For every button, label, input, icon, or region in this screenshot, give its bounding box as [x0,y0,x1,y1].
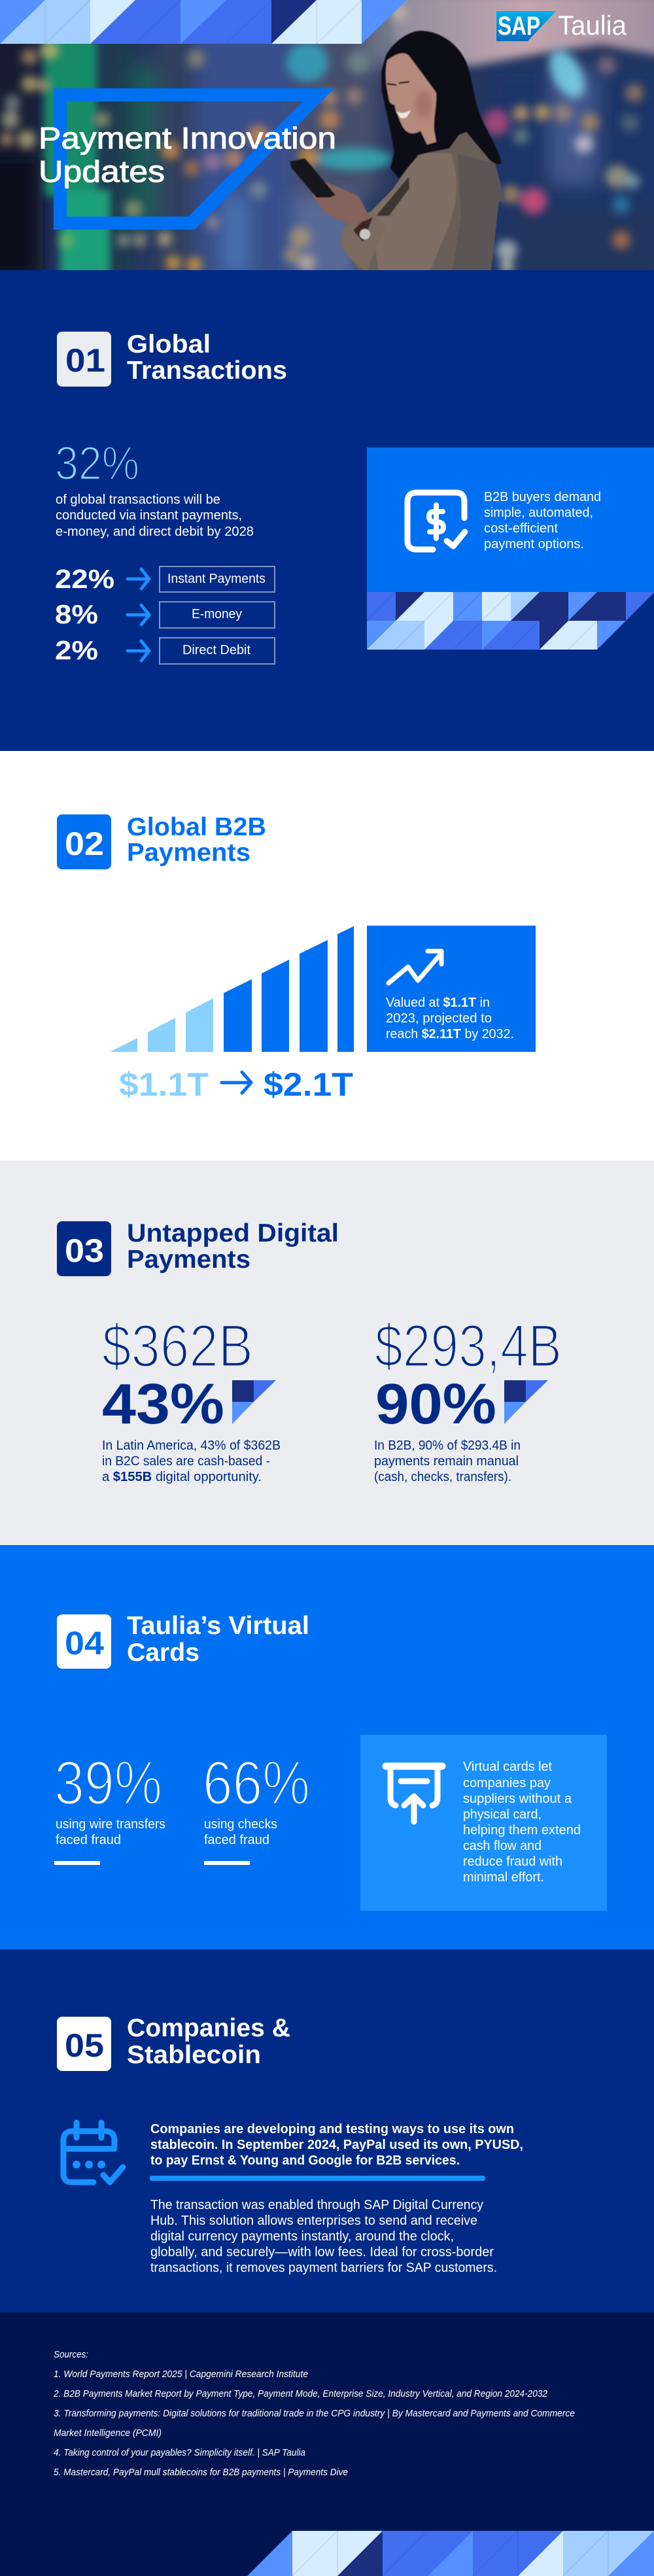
SAP Taulia logo: SAP [498,12,540,41]
stat column: Latin America: in B2C sales are cash-based - [102,1454,270,1469]
callout panel: virtual cards: minimal effort. [463,1870,544,1885]
growth figures: $2.1T [264,1066,353,1103]
stat column: B2B [374,1313,562,1484]
section 03 heading [127,1219,339,1274]
section 04 badge: 04 [65,1625,104,1662]
section 03 badge [57,1221,111,1276]
stat: checks fraud: 66% [203,1749,310,1818]
section 01 heading [127,330,287,385]
icon: calendar with check [63,2123,123,2182]
icon: rising trend arrow [388,951,441,983]
breakdown row: e-money: 8% [55,599,98,629]
stat column: Latin America: a $155B digital opportunity. [102,1470,262,1484]
section 05 heading: Stablecoin [127,2041,261,2069]
callout panel: market value [367,926,536,1052]
growth figures [119,1066,353,1103]
stablecoin lead text: stablecoin. In September 2024, PayPal used its own, PYUSD, [150,2138,523,2152]
stat description: e-money, and direct debit by 2028 [56,525,254,539]
stablecoin body text: The transaction was enabled through SAP Digital Currency [150,2198,483,2212]
breakdown row: e-money [55,599,275,629]
callout panel: market value: 2023, projected to [386,1011,492,1026]
section 01 badge [57,332,111,387]
section 02 background [0,751,654,1160]
bokeh lights [0,5,644,273]
section 04 heading [127,1612,309,1667]
section 04 heading: Taulia’s Virtual [127,1612,309,1640]
sources list [53,2349,575,2478]
section 02 badge: 02 [65,826,104,862]
stablecoin body text: globally, and securely—with low fees. Ideal for cross-border [150,2245,494,2259]
callout geometric pattern [367,592,654,650]
section 03 badge: 03 [65,1232,104,1269]
stat description: of global transactions will be [56,493,220,507]
top geometric pattern banner [0,0,407,44]
stat column: Latin America [102,1313,281,1484]
sources list: 3. Transforming payments: Digital solutions for traditional trade in the CPG industry | By Mastercard and Payments and Commerce [54,2408,575,2419]
section 04 heading: Cards [127,1639,199,1667]
bar chart: rising market value [110,926,354,1052]
stat column: B2B: $293,4B [375,1313,562,1380]
hero title frame [54,88,334,230]
breakdown row: direct debit: Direct Debit [182,643,250,657]
stat: checks fraud: faced fraud [204,1833,269,1847]
breakdown row: direct debit [55,635,275,665]
section 05 badge [57,2017,111,2071]
icon: dollar document with check [407,493,465,549]
hero photo: woman with phone against night city [0,0,654,288]
stablecoin body text [150,2198,497,2275]
footer geometric pattern [247,2531,654,2576]
callout panel: B2B buyers: payment options. [484,537,584,551]
section 05 background [0,1949,654,2312]
stat: wire transfers fraud: faced fraud [56,1833,121,1847]
section 03 heading: Payments [127,1245,250,1274]
stat column: Latin America: $362B [102,1313,253,1380]
section 02 heading: Global B2B [127,813,266,841]
callout panel: virtual cards: reduce fraud with [463,1854,562,1869]
section 02 heading [127,813,266,867]
stat description [56,493,254,539]
icon: card with upload arrow [386,1766,442,1822]
stat: wire transfers fraud: 39% [54,1749,162,1818]
breakdown row: instant payments [55,564,275,594]
section 03 background [0,1160,654,1545]
callout panel: B2B buyers [367,447,654,592]
stablecoin lead text: to pay Ernst & Young and Google for B2B services. [150,2153,460,2168]
section 05 heading: Companies & [127,2014,290,2042]
callout panel: virtual cards: helping them extend [463,1823,581,1837]
sources list: 1. World Payments Report 2025 | Capgemini Research Institute [54,2369,308,2380]
sources list: Market Intelligence (PCMI) [54,2428,162,2439]
section 05 badge: 05 [65,2027,104,2064]
stat column: B2B: 90% [375,1372,496,1436]
stat: wire transfers fraud: using wire transfers [56,1817,165,1832]
callout panel: market value: Valued at $1.1T in [386,996,490,1010]
section 01 background [0,270,654,751]
breakdown row: direct debit: 2% [55,635,98,665]
sources list: 5. Mastercard, PayPal mull stablecoins for B2B payments | Payments Dive [54,2467,348,2478]
callout panel: B2B buyers: simple, automated, [484,506,593,520]
sources list: 4. Taking control of your payables? Simplicity itself. | SAP Taulia [54,2447,305,2458]
hero title: Payment Innovation [39,121,336,155]
callout panel: virtual cards: Virtual cards let [463,1760,552,1774]
SAP Taulia logo: Taulia [558,10,627,41]
callout panel: B2B buyers: cost-efficient [484,521,558,536]
stablecoin body text: transactions, it removes payment barriers for SAP customers. [150,2261,497,2275]
stablecoin body text: digital currency payments instantly, around the clock, [150,2229,454,2244]
stat column: B2B: (cash, checks, transfers). [374,1470,511,1484]
hero title: Updates [39,154,165,188]
section 02 badge [57,814,111,869]
stablecoin lead text: Companies are developing and testing ways to use its own [150,2122,514,2136]
stat column: B2B: payments remain manual [374,1454,519,1469]
stat: wire transfers fraud [54,1749,165,1865]
stat column: Latin America: In Latin America, 43% of $362B [102,1438,281,1453]
32 percent stat: 32% [55,438,139,490]
section 05 heading [127,2014,290,2069]
callout panel: virtual cards: suppliers without a [463,1792,572,1806]
callout panel: virtual cards: physical card, [463,1807,542,1822]
section 04 background [0,1545,654,1949]
sources list: Sources: [54,2349,88,2360]
stat description: conducted via instant payments, [56,508,242,523]
section 04 badge [57,1614,111,1669]
growth figures: $1.1T [119,1066,209,1103]
section 01 heading: Global [127,330,211,358]
stat column: B2B: In B2B, 90% of $293.4B in [374,1438,521,1453]
icon: triangle mark [504,1380,548,1424]
callout panel: B2B buyers: B2B buyers demand [484,490,601,504]
callout panel: market value: reach $2.11T by 2032. [386,1027,514,1041]
stat: checks fraud [203,1749,310,1865]
section 02 heading: Payments [127,839,250,867]
arrow: growth [222,1072,251,1093]
hero title [39,121,336,188]
stablecoin body text: Hub. This solution allows enterprises to send and receive [150,2214,477,2228]
breakdown row: instant payments: Instant Payments [167,572,266,586]
breakdown row: e-money: E-money [192,607,242,621]
callout panel: virtual cards: companies pay [463,1776,551,1790]
callout panel: virtual cards: cash flow and [463,1839,542,1853]
stat column: Latin America: 43% [102,1372,224,1436]
woman figure [290,31,506,275]
sources list: 2. B2B Payments Market Report by Payment Type, Payment Mode, Enterprise Size, Industry Vertical, and Region 2024-2032 [53,2388,548,2399]
section 01 heading: Transactions [127,357,287,385]
stat: checks fraud: using checks [204,1817,277,1832]
breakdown row: instant payments: 22% [55,564,114,594]
section 01 badge: 01 [65,342,105,379]
green tower [44,39,110,278]
callout panel: virtual cards [360,1735,607,1911]
footer background [0,2312,654,2576]
sky and skyline [392,0,654,65]
icon: triangle mark [232,1380,276,1424]
SAP Taulia logo [496,10,627,41]
divider bar [150,2176,485,2181]
section 03 heading: Untapped Digital [127,1219,339,1247]
stablecoin lead text [150,2122,523,2168]
